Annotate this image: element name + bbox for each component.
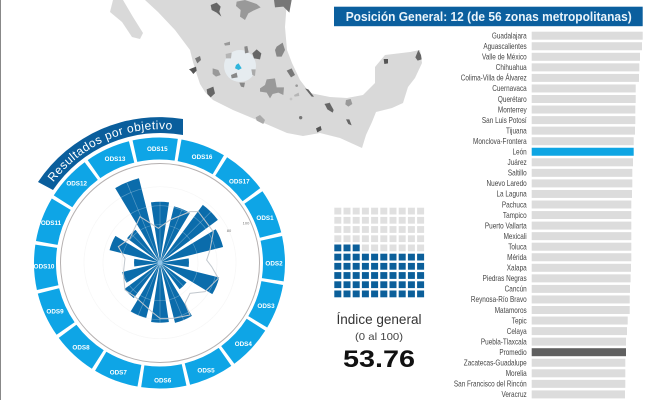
bar labels: Puerto Vallarta (485, 221, 528, 231)
ODS segment labels: ODS1 (256, 215, 274, 222)
ODS segment labels: ODS6 (154, 377, 172, 384)
bar labels: Tijuana (506, 126, 528, 136)
ranking bars (454, 31, 643, 399)
bar labels: Morelia (506, 368, 528, 378)
bar labels: Veracruz (501, 389, 527, 399)
map: metropolitan zones west and centre (189, 0, 331, 132)
ODS segment labels: ODS7 (110, 370, 127, 377)
map: mainland (145, 0, 422, 148)
bar labels: Promedio (499, 347, 527, 357)
map of Mexico (110, 0, 422, 148)
ODS segment labels: ODS9 (46, 308, 64, 315)
bar labels: Tampico (503, 210, 527, 220)
ODS segment labels: ODS5 (197, 367, 215, 374)
map: León (235, 63, 242, 70)
waffle chart: 53 of 100 (334, 208, 424, 297)
background grid circles (84, 187, 236, 339)
bar labels: Juárez (508, 157, 527, 167)
ODS segment labels: ODS13 (105, 156, 126, 163)
bar labels: Aguascalientes (483, 41, 527, 51)
bar labels: Tepic (512, 316, 527, 326)
waffle: filled squares (334, 244, 424, 297)
ranking header: Posición General: 12 (de 56 zonas metropolitanas) (346, 10, 632, 24)
ODS segment labels: ODS11 (41, 220, 62, 227)
index label: Índice general: Índice general (336, 312, 422, 327)
bars (532, 32, 643, 398)
wedge bars (109, 177, 224, 323)
bar labels: San Luis Potosí (482, 115, 527, 125)
outer scale circle (60, 164, 260, 362)
ODS segment labels: ODS17 (229, 179, 250, 186)
ring of ODS segments (33, 137, 286, 389)
ODS segment labels: ODS16 (192, 154, 213, 161)
bar labels: Xalapa (507, 263, 528, 273)
bar labels: Celaya (507, 326, 528, 336)
bar labels: Monclova-Frontera (473, 136, 528, 146)
ODS segment labels: ODS3 (257, 303, 275, 310)
average outline (118, 212, 218, 318)
waffle: empty squares (334, 208, 424, 251)
index value: 53.76 (343, 346, 415, 373)
bar labels: Saltillo (508, 168, 527, 178)
bar labels: Mérida (507, 252, 528, 262)
ODS segment labels: ODS4 (235, 341, 252, 348)
bar labels: Cuernavaca (492, 83, 528, 93)
centre dot (158, 260, 162, 265)
index range: 0 al 100: (0 al 100) (355, 331, 403, 343)
map: highlight around León (224, 50, 256, 82)
ODS segment labels: ODS10 (34, 263, 55, 270)
bar labels: León (512, 147, 527, 157)
bar labels: Valle de México (482, 52, 527, 62)
bar labels: La Laguna (496, 189, 528, 199)
bar labels: Colima-Villa de Álvarez (461, 73, 527, 83)
bar labels: Toluca (508, 242, 528, 252)
scale label 100: 100 (243, 220, 250, 226)
bar labels: Guadalajara (492, 31, 528, 41)
bar labels: Matamoros (495, 305, 527, 315)
bar labels: Piedras Negras (483, 273, 527, 283)
bar labels (454, 31, 528, 399)
ODS segment labels: ODS15 (147, 146, 168, 153)
bar labels: Querétaro (498, 94, 527, 104)
scale label 80: 80 (227, 228, 232, 233)
ranking header (334, 7, 643, 26)
ODS segment labels: ODS8 (72, 345, 90, 352)
bar labels: Pachuca (502, 200, 528, 210)
map: metropolitan zones southeast (325, 50, 422, 125)
title ribbon: Resultados por objetivo: Resultados por objetivo (48, 120, 172, 182)
bar labels: Monterrey (498, 105, 527, 115)
map: Baja California (110, 0, 143, 39)
ODS segment labels: ODS2 (265, 261, 283, 268)
bar labels: Mexicali (504, 231, 527, 241)
bar labels: Puebla-Tlaxcala (481, 337, 528, 347)
bar labels: Chihuahua (496, 62, 528, 72)
bar: León highlight (532, 148, 634, 156)
bar labels: San Francisco del Rincón (454, 379, 527, 389)
bar: Promedio (532, 348, 626, 356)
bar labels: Nuevo Laredo (487, 178, 527, 188)
bar labels: Cancún (505, 284, 527, 294)
bar labels: Reynosa-Río Bravo (471, 294, 527, 304)
bar labels: Zacatecas-Guadalupe (464, 358, 527, 368)
ODS segment labels (34, 146, 283, 384)
ODS segment labels: ODS12 (66, 181, 88, 188)
radial chart: results by objective (33, 137, 286, 389)
